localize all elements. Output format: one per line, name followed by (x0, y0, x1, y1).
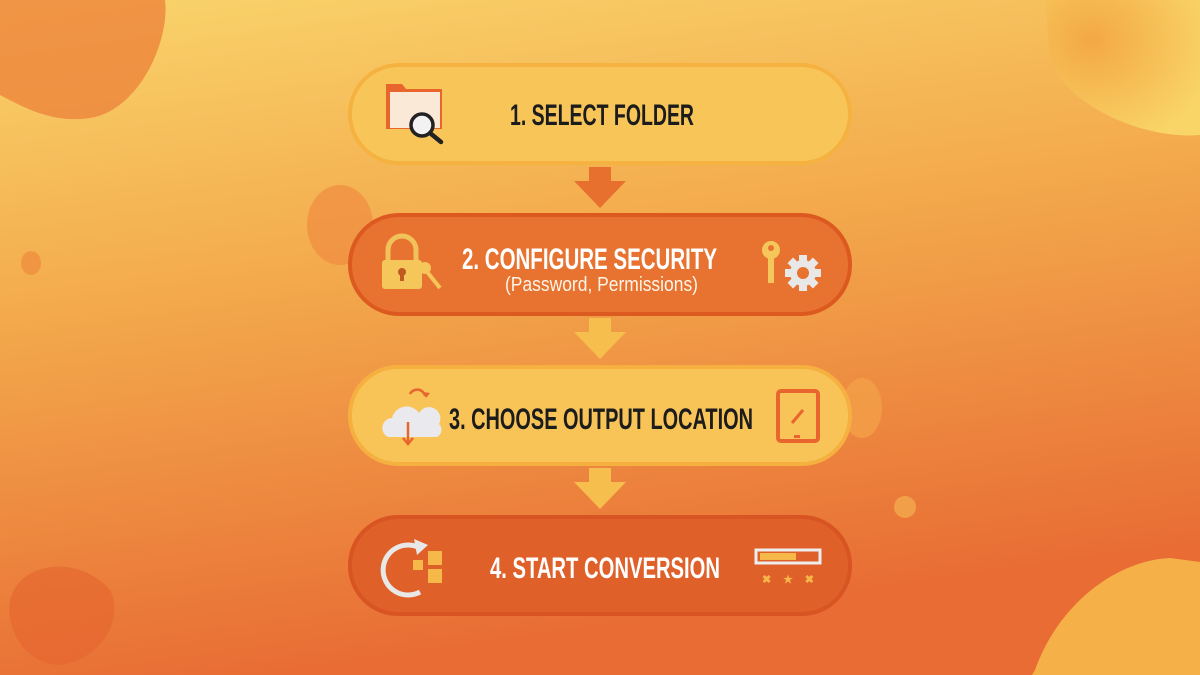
heading: 3. CHOOSE OUTPUT LOCATION (449, 403, 753, 436)
step 4: start conversion (350, 517, 850, 614)
arrow 2 (574, 318, 626, 359)
icon: tablet (778, 391, 818, 441)
icon: progress bar: ✖ ★ ✖ (762, 574, 814, 586)
arrow 3 (574, 468, 626, 509)
heading: 1. SELECT FOLDER (510, 99, 694, 132)
icon: padlock and keys (382, 236, 440, 289)
icon: folder search (386, 84, 442, 142)
icon: cloud with arrows (382, 390, 441, 444)
heading: 2. CONFIGURE SECURITY (462, 243, 717, 276)
arrow 1 (574, 167, 626, 208)
step 3: choose output location (350, 367, 850, 464)
step 1: select folder (350, 65, 850, 163)
step 2: configure security (350, 215, 850, 314)
icon: progress bar (756, 550, 820, 586)
heading: 4. START CONVERSION (490, 552, 720, 585)
subtitle: (Password, Permissions) (505, 274, 698, 296)
icon: key and gear (762, 241, 821, 291)
icon: conversion cycle (383, 539, 442, 595)
